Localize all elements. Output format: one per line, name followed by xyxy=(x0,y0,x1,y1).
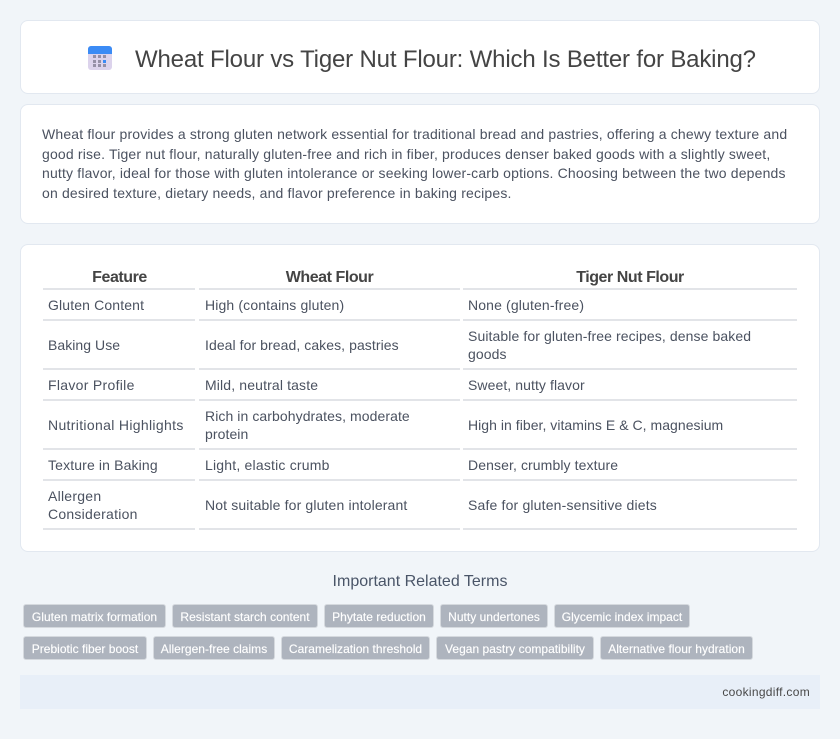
heading: Wheat Flour vs Tiger Nut Flour: Which Is Better for Baking? xyxy=(135,46,756,73)
row: allergen consideration: Not suitable for gluten intolerant xyxy=(205,497,407,513)
title panel xyxy=(20,20,820,94)
related terms tags: Resistant starch content xyxy=(180,610,310,624)
row: flavor profile: Sweet, nutty flavor xyxy=(468,377,585,393)
related terms heading: Important Related Terms xyxy=(333,573,507,590)
row: texture in baking: Texture in Baking xyxy=(48,457,158,473)
row: texture in baking: Light, elastic crumb xyxy=(205,457,330,473)
intro paragraph: Wheat flour provides a strong gluten network essential for traditional bread and pastries, offering a chewy texture and xyxy=(42,126,787,142)
related terms tags xyxy=(23,604,753,660)
tag row 1 xyxy=(23,604,166,628)
row: nutritional highlights: protein xyxy=(205,426,248,442)
column headers xyxy=(92,269,684,286)
related terms tags: Vegan pastry compatibility xyxy=(445,642,585,656)
row: nutritional highlights: Rich in carbohydrates, moderate xyxy=(205,408,410,424)
related terms tags: Caramelization threshold xyxy=(289,642,422,656)
comparison table panel xyxy=(20,244,820,552)
intro paragraph: on desired texture, dietary needs, and flavor preference in baking recipes. xyxy=(42,185,512,201)
row: allergen consideration xyxy=(48,488,657,522)
row: baking use: goods xyxy=(468,346,507,362)
related terms tags: Allergen-free claims xyxy=(161,642,267,656)
row: texture in baking: Denser, crumbly texture xyxy=(468,457,618,473)
related terms tags: Phytate reduction xyxy=(332,610,426,624)
column headers: Feature xyxy=(92,269,147,286)
intro text panel xyxy=(20,104,820,224)
row: nutritional highlights: High in fiber, vitamins E & C, magnesium xyxy=(468,417,723,433)
row: texture in baking xyxy=(48,457,618,473)
row: gluten content xyxy=(48,297,584,313)
tag row 1: Gluten matrix formation xyxy=(32,610,157,624)
intro paragraph xyxy=(42,126,787,201)
row: gluten content: High (contains gluten) xyxy=(205,297,344,313)
related terms tags: Glycemic index impact xyxy=(562,610,682,624)
intro paragraph: good rise. Tiger nut flour, naturally gluten-free and rich in fiber, produces denser baked goods with a slightly sweet, xyxy=(42,146,770,162)
row: allergen consideration: Allergen xyxy=(48,488,101,504)
intro paragraph: nutty flavor, ideal for those with gluten intolerance or seeking lower-carb options. Choosing between the two depends xyxy=(42,165,786,181)
row: baking use: Suitable for gluten-free recipes, dense baked xyxy=(468,328,751,344)
row: allergen consideration: Safe for gluten-sensitive diets xyxy=(468,497,657,513)
footer source: cookingdiff.com xyxy=(722,685,810,699)
tag row 2 xyxy=(23,636,147,660)
icon: calendar xyxy=(88,46,112,70)
row: flavor profile: Mild, neutral taste xyxy=(205,377,318,393)
row: baking use xyxy=(48,328,751,362)
related terms tags: Alternative flour hydration xyxy=(608,642,745,656)
row: gluten content: None (gluten-free) xyxy=(468,297,584,313)
row: flavor profile xyxy=(48,377,585,393)
row: gluten content: Gluten Content xyxy=(48,297,144,313)
row: nutritional highlights xyxy=(48,408,723,442)
column headers: Tiger Nut Flour xyxy=(576,269,684,286)
row: allergen consideration: Consideration xyxy=(48,506,138,522)
tag row 2: Prebiotic fiber boost xyxy=(32,642,138,656)
column headers: Wheat Flour xyxy=(286,269,373,286)
row: flavor profile: Flavor Profile xyxy=(48,377,135,393)
row: nutritional highlights: Nutritional Highlights xyxy=(48,417,184,433)
related terms tags: Nutty undertones xyxy=(448,610,540,624)
footer bar xyxy=(20,675,820,709)
row: baking use: Ideal for bread, cakes, pastries xyxy=(205,337,399,353)
row: baking use: Baking Use xyxy=(48,337,120,353)
